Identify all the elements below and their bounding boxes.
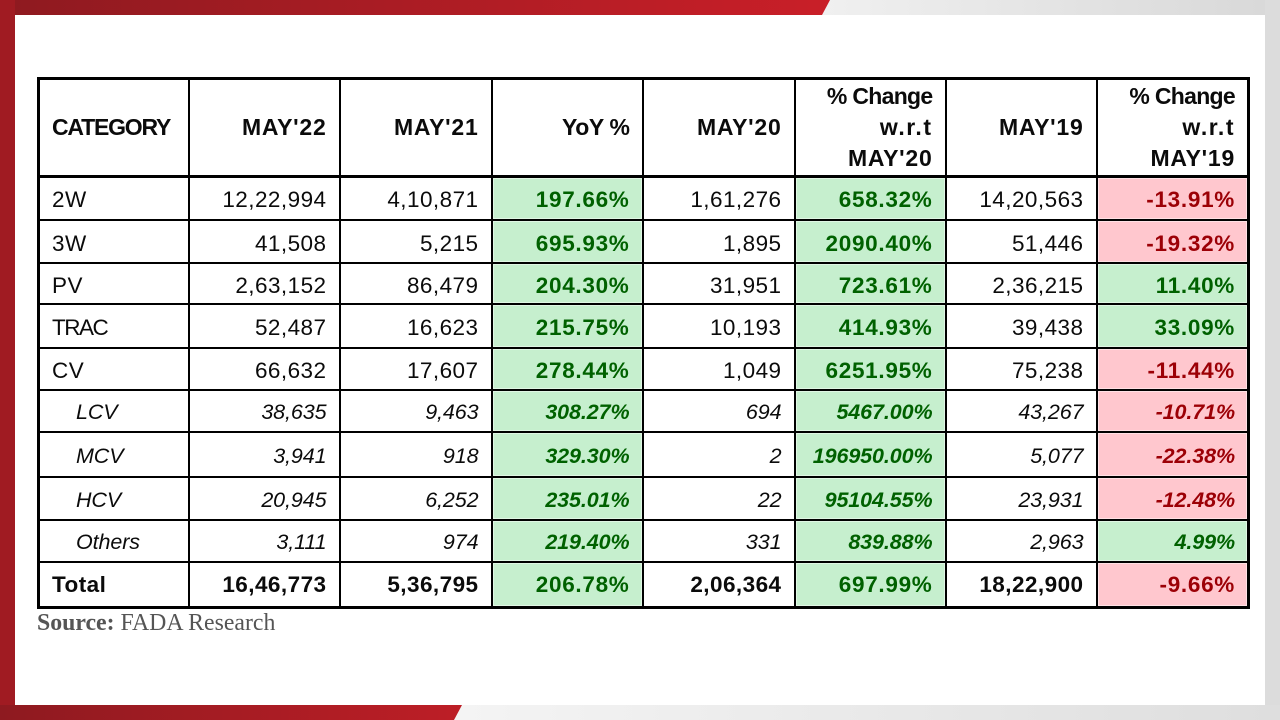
row: LCV: 5467.00% (836, 400, 932, 424)
row: TRAC: TRAC (52, 315, 107, 340)
row: 2W: 2W (52, 187, 87, 212)
row: 2W (52, 178, 1247, 219)
row: PV: PV (52, 273, 83, 298)
row: PV: 204.30% (536, 273, 630, 298)
row: 3W: 695.93% (536, 230, 630, 256)
row: MCV: 918 (443, 444, 478, 468)
row: 2W: 12,22,994 (222, 187, 326, 212)
table header row (52, 83, 1247, 606)
table header row: CATEGORY (52, 114, 170, 140)
row: Total: 18,22,900 (979, 572, 1084, 597)
row: LCV: 38,635 (261, 400, 326, 424)
row: Total: 206.78% (536, 572, 630, 597)
row: 2W: 197.66% (536, 187, 630, 212)
table header row: MAY'20 (848, 145, 932, 171)
table header row: MAY'19 (1150, 145, 1235, 171)
row: HCV: 20,945 (261, 488, 326, 512)
row: TRAC: 33.09% (1154, 315, 1235, 340)
row: HCV: 22 (758, 488, 782, 512)
row: Total (52, 563, 1247, 606)
row: HCV: 235.01% (545, 488, 630, 512)
row: Total: Total (52, 572, 106, 597)
row: HCV: 23,931 (1018, 488, 1084, 512)
row: TRAC: 215.75% (536, 315, 630, 340)
row: MCV: MCV (76, 444, 123, 468)
row: 3W: -19.32% (1146, 230, 1235, 256)
row: Others: Others (76, 530, 140, 554)
row: MCV: -22.38% (1156, 444, 1235, 468)
table header row: MAY'19 (999, 114, 1084, 140)
row: PV: 723.61% (839, 273, 932, 298)
row: MCV: 196950.00% (813, 444, 932, 468)
row: 2W: 4,10,871 (387, 187, 478, 212)
row: CV: 1,049 (723, 358, 782, 383)
row: 2W: 1,61,276 (690, 187, 782, 212)
row: CV: -11.44% (1148, 358, 1235, 383)
table header row: % Change (827, 83, 932, 109)
row: Others: 974 (443, 530, 478, 554)
row: CV: CV (52, 358, 84, 383)
row: PV: 2,36,215 (992, 273, 1084, 298)
table header row: MAY'22 (242, 114, 326, 140)
row: Total: -9.66% (1160, 572, 1235, 597)
row: TRAC: 39,438 (1012, 315, 1084, 340)
row: 3W (52, 221, 1247, 262)
row: LCV: 43,267 (1018, 400, 1084, 424)
row: MCV: 5,077 (1030, 444, 1084, 468)
row: HCV: HCV (76, 488, 121, 512)
row: HCV: -12.48% (1156, 488, 1235, 512)
row: CV: 66,632 (255, 358, 326, 383)
row: Others: 219.40% (545, 530, 630, 554)
row: MCV: 2 (770, 444, 782, 468)
row: PV: 86,479 (407, 273, 478, 298)
row: CV: 278.44% (536, 358, 630, 383)
row: 2W: 14,20,563 (979, 187, 1084, 212)
table header row: MAY'21 (394, 114, 478, 140)
row: LCV: LCV (76, 400, 118, 424)
row: LCV (76, 391, 1247, 431)
row: PV: 2,63,152 (235, 273, 326, 298)
row: HCV: 95104.55% (825, 488, 932, 512)
row: MCV (76, 433, 1247, 476)
data table: vehicle retail by category (37, 77, 1250, 609)
row: MCV: 3,941 (273, 444, 326, 468)
row: CV: 17,607 (407, 358, 478, 383)
row: TRAC: 16,623 (407, 315, 478, 340)
row: TRAC: 10,193 (710, 315, 782, 340)
row: 3W: 3W (52, 230, 87, 256)
row: Others: 4.99% (1175, 530, 1235, 554)
row: MCV: 329.30% (545, 444, 630, 468)
row: 2W: -13.91% (1146, 187, 1235, 212)
row: 3W: 5,215 (420, 230, 478, 256)
row: HCV (76, 478, 1247, 519)
row: 3W: 41,508 (255, 230, 326, 256)
table header row: MAY'20 (697, 114, 782, 140)
row: LCV: 9,463 (425, 400, 478, 424)
row: Total: 16,46,773 (222, 572, 326, 597)
row: Total: 697.99% (839, 572, 932, 597)
table header row: w.r.t (1182, 114, 1235, 140)
row: HCV: 6,252 (425, 488, 478, 512)
row: Others: 3,111 (276, 530, 326, 554)
row: 3W: 1,895 (723, 230, 782, 256)
row: LCV: 308.27% (545, 400, 630, 424)
row: Total: 5,36,795 (387, 572, 478, 597)
row: PV: 11.40% (1156, 273, 1235, 298)
row: LCV: -10.71% (1156, 400, 1235, 424)
row: TRAC (52, 305, 1247, 347)
row: CV: 6251.95% (826, 358, 932, 383)
row: 2W: 658.32% (839, 187, 932, 212)
table header row: YoY % (562, 114, 630, 140)
row: TRAC: 414.93% (839, 315, 932, 340)
source note: Source: FADA Research (37, 610, 275, 636)
row: CV (52, 349, 1247, 389)
row: PV: 31,951 (710, 273, 782, 298)
row: LCV: 694 (746, 400, 782, 424)
table header row: % Change (1129, 83, 1235, 109)
row: Others (76, 521, 1247, 561)
row: TRAC: 52,487 (255, 315, 326, 340)
row: CV: 75,238 (1012, 358, 1084, 383)
row: Others: 2,963 (1030, 530, 1084, 554)
row: Others: 839.88% (848, 530, 932, 554)
table header row: w.r.t (880, 114, 932, 140)
row: Others: 331 (746, 530, 782, 554)
row: 3W: 2090.40% (826, 230, 932, 256)
row: PV (52, 264, 1247, 303)
row: 3W: 51,446 (1012, 230, 1084, 256)
row: Total: 2,06,364 (690, 572, 782, 597)
